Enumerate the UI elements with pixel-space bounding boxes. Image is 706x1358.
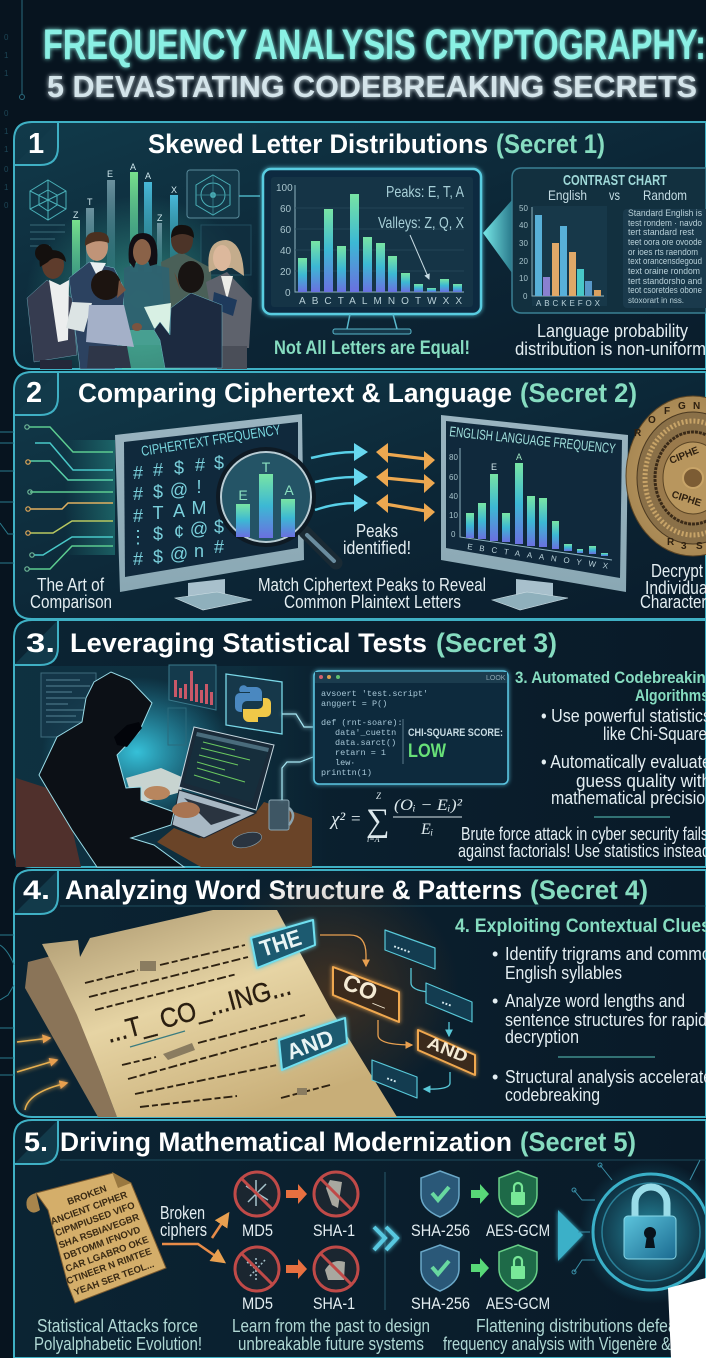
laptop <box>172 727 274 838</box>
caption: match ciphertext peaks <box>258 575 486 612</box>
title: 5 DEVASTATING CODEBREAKING SECRETS <box>47 69 697 104</box>
text: 1 <box>4 145 9 154</box>
code window with chi-square score: lew· <box>335 758 355 768</box>
panel 5 number: 5. <box>24 1127 48 1157</box>
formula: chi-square: = <box>351 809 361 828</box>
arrows: broken ciphers branches <box>162 1214 228 1262</box>
cipher symbols: $ <box>174 458 184 478</box>
caption: flattening distributions <box>443 1316 681 1354</box>
monitor: english language frequency: 0 <box>451 530 456 539</box>
code window with chi-square score: CHI-SQUARE SCORE: <box>408 727 503 739</box>
labels: SHA-256 AES-GCM: AES-GCM <box>486 1221 550 1240</box>
icon: cipher dial: R <box>667 537 675 548</box>
panel: secret 5 mathematical modernization <box>14 1120 706 1358</box>
monitor: letter frequency bar chart: 100 <box>276 183 293 194</box>
code window with chi-square score: data'_cuettn <box>335 728 396 738</box>
scroll: broken ancient cipher: CIPMPIUSED VIFO <box>54 1200 136 1239</box>
cipher symbols: ¢ <box>174 522 184 542</box>
caption: not all letters are equal: Not All Letters are Equal! <box>274 338 470 359</box>
parchment lines <box>85 945 330 1107</box>
scroll: broken ancient cipher: DBTOMM IFNOVD <box>62 1225 142 1263</box>
caption: the art of comparison: The Art of <box>37 575 105 595</box>
text block: exploiting contextual clues: decryption <box>505 1027 579 1047</box>
icon: magnifier: A <box>284 482 294 498</box>
caption: statistical attacks <box>34 1316 202 1354</box>
code window with chi-square score: LOW <box>408 741 446 762</box>
labels: MD5 SHA-1: MD5 <box>242 1221 273 1240</box>
formula: chi-square: (Oᵢ − Eᵢ)² <box>394 797 463 814</box>
tag: AND orange <box>418 1030 475 1075</box>
label: broken ciphers <box>160 1203 207 1240</box>
panel 2 number: 2 <box>26 377 42 409</box>
cipher symbols: n <box>194 541 204 561</box>
icon: magnifier: E <box>238 487 248 503</box>
tag: CO_ <box>333 967 399 1022</box>
labels: SHA-256 AES-GCM: SHA-256 <box>411 1221 470 1240</box>
cipher symbols <box>129 453 224 569</box>
mug <box>269 800 293 830</box>
icon: cipher dial: F <box>664 406 670 417</box>
text: 1 <box>4 183 9 192</box>
caption: flattening distributions: Flattening distributions defeat <box>476 1316 681 1336</box>
glowing table <box>122 330 180 369</box>
cipher symbols: $ <box>153 547 163 567</box>
labels: MD5 SHA-1 <box>242 1221 355 1313</box>
labels: MD5 SHA-1: MD5 <box>242 1294 273 1313</box>
icons: prohibited MD5 and SHA-1 <box>235 1172 358 1291</box>
scroll: broken ancient cipher <box>26 1172 166 1303</box>
code window with chi-square score: printtn(1) <box>321 768 372 778</box>
code window with chi-square score: avsoert 'test.script' <box>321 689 428 699</box>
word graph: trigram tags: CO_ <box>339 969 394 1011</box>
illustration: team of analysts around glowing table: Z <box>157 213 163 223</box>
person: woman in front seen from behind <box>86 270 142 368</box>
caption: match ciphertext peaks: Match Ciphertext Peaks to Reveal <box>258 575 486 595</box>
label: peaks identified <box>343 521 411 558</box>
icon: cipher dial: 3 <box>681 541 687 552</box>
panel 1 heading: (Secret 1) <box>496 129 605 159</box>
callout: peaks and valleys <box>378 184 464 279</box>
caption: statistical attacks: Polyalphabetic Evolution! <box>34 1334 202 1354</box>
illustration: team of analysts around glowing table: A <box>130 162 136 172</box>
monitor: english language frequency: EBCTAAANOYWX <box>467 542 609 571</box>
person: woman centre <box>124 233 172 345</box>
monitor: english language frequency: 60 <box>449 473 458 482</box>
text: 1 <box>4 69 9 78</box>
panel: secret 3 statistical tests <box>14 620 706 867</box>
hooded figure <box>39 672 184 867</box>
panel 2 heading: Comparing Ciphertext & Language <box>78 378 512 408</box>
labels: MD5 SHA-1: SHA-1 <box>313 1221 355 1240</box>
card: contrast chart: tert standard rest <box>628 227 694 237</box>
labels: MD5 SHA-1: SHA-1 <box>313 1294 355 1313</box>
code window with chi-square score: LOOK <box>486 675 506 682</box>
card: contrast chart: tert standorsho and <box>628 276 702 286</box>
panel 4 heading: Analyzing Word Structure & Patterns <box>65 875 522 905</box>
word graph: trigram tags: THE <box>257 924 304 962</box>
cipher symbols: $ <box>214 453 224 473</box>
icon: cipher dial: R <box>634 428 642 439</box>
card: contrast chart: or ioes rts raendom <box>628 247 698 257</box>
cipher symbols: @ <box>170 544 188 564</box>
icon: magnifier: T <box>262 459 271 475</box>
monitor: english language frequency: E <box>491 462 497 472</box>
cipher symbols: # <box>133 463 143 483</box>
monitor: letter frequency bar chart: 0 <box>285 288 291 299</box>
cipher symbols: # <box>133 484 143 504</box>
monitor: letter frequency bar chart: 60 <box>280 204 292 215</box>
card: contrast chart: 10 <box>519 274 528 283</box>
code window with chi-square score <box>314 671 508 784</box>
text block: exploiting contextual clues: codebreaking <box>505 1085 600 1105</box>
text: 0 <box>4 165 9 174</box>
panel 1 heading: Skewed Letter Distributions <box>148 129 488 159</box>
caption: decrypt individual characters <box>640 561 706 612</box>
text: 1 <box>4 51 9 60</box>
scroll: broken ancient cipher: CAR LGABRO OKE <box>64 1234 150 1275</box>
caption: match ciphertext peaks: Common Plaintext Letters <box>284 592 461 612</box>
card: contrast chart <box>512 168 706 313</box>
word graph: trigram tags: AND <box>283 1025 337 1065</box>
cipher symbols: # <box>214 537 224 557</box>
cipher symbols: $ <box>214 517 224 537</box>
illustration: team of analysts around glowing table: Z <box>73 210 79 220</box>
card: contrast chart: 0 <box>523 292 528 301</box>
text block: exploiting contextual clues: • <box>492 1067 498 1087</box>
card: contrast chart: Random <box>643 187 687 203</box>
cipher symbols: M <box>192 498 206 518</box>
monitor: english language frequency <box>441 415 628 610</box>
illustration: team of analysts around glowing table: T <box>87 197 93 207</box>
cipher symbols: # <box>133 506 143 526</box>
caption: learn from the past: Learn from the past to design <box>232 1316 430 1336</box>
illustration: hooded hacker at laptop <box>15 665 330 867</box>
monitor: english language frequency: 10 <box>449 511 458 520</box>
monitor: english language frequency: 40 <box>449 492 458 501</box>
icon: cipher dial: O <box>648 415 656 426</box>
text block: exploiting contextual clues: • <box>492 944 498 964</box>
icon: cipher dial <box>626 396 706 556</box>
text block: exploiting contextual clues <box>455 916 706 1105</box>
illustration: team of analysts around glowing table: X <box>171 185 177 195</box>
cipher symbols: @ <box>190 519 208 539</box>
caption: brute force attack <box>458 824 706 861</box>
monitor: english language frequency: 80 <box>449 453 458 462</box>
labels: SHA-256 AES-GCM <box>411 1221 550 1313</box>
title <box>43 21 706 104</box>
word graph: trigram tags: AND <box>425 1033 471 1066</box>
empty word boxes <box>372 930 472 1098</box>
label: peaks identified: Peaks <box>356 521 398 541</box>
icon: magnifier <box>219 450 336 563</box>
text: 0 <box>4 109 9 118</box>
card: contrast chart: stoxorart in nss. <box>628 296 684 305</box>
formula: chi-square: χ² <box>329 809 345 830</box>
card: contrast chart: vs <box>609 187 620 203</box>
monitor: letter frequency bar chart <box>263 169 481 334</box>
card: contrast chart: ABCKEFOX <box>536 299 601 308</box>
cipher symbols: # <box>133 549 143 569</box>
callout: peaks and valleys: Peaks: E, T, A <box>386 184 464 201</box>
text: 1 <box>4 127 9 136</box>
person: man right in sage sweater <box>161 225 212 320</box>
word graph: trigram tags <box>251 920 475 1098</box>
monitor: english language frequency: ENGLISH LANGUAGE FREQUENCY <box>449 423 617 456</box>
panel 3 heading: (Secret 3) <box>436 628 557 658</box>
cipher symbols: ! <box>196 477 202 497</box>
caption: language probability: Language probability <box>537 321 688 341</box>
card: contrast chart: English <box>548 187 587 203</box>
circuit lines <box>0 425 115 571</box>
icon: radar hexagon left <box>30 180 66 220</box>
cipher symbols: $ <box>153 482 163 502</box>
icons: shields and padlocks <box>421 1171 537 1291</box>
icon: chevrons <box>374 1227 397 1250</box>
label: broken ciphers: ciphers <box>160 1220 207 1240</box>
chart axis letters: ABCTALMNOTWXX <box>299 296 462 307</box>
scroll: broken ancient cipher: CTINEER N RIMTEE <box>65 1246 153 1287</box>
connector beam <box>483 200 512 273</box>
card: contrast chart: CONTRAST CHART <box>563 172 667 189</box>
text: 0 <box>4 201 9 210</box>
cipher symbols: T <box>152 503 164 523</box>
code window with chi-square score: anggert = P() <box>321 699 387 709</box>
panel 1 number: 1 <box>28 128 44 160</box>
caption: learn from the past <box>232 1316 430 1354</box>
card: contrast chart: Standard English is <box>628 208 702 218</box>
icon: cipher dial: CIPHE <box>668 445 701 467</box>
monitor: ciphertext frequency: CIPHERTEXT FREQUENCY <box>140 421 282 459</box>
monitor: ciphertext frequency <box>115 414 304 610</box>
scroll: broken ancient cipher: ANCIENT CIPHER <box>49 1190 129 1228</box>
caption: statistical attacks: Statistical Attacks force <box>37 1316 198 1336</box>
icon: cipher dial: CIPHE <box>670 489 703 509</box>
label: peaks identified: identified! <box>343 538 411 558</box>
decoded fragment: ...T_ CO_...ING... <box>103 971 294 1049</box>
icon: python logo tile <box>226 674 282 734</box>
icon: cipher dial: S <box>696 541 703 552</box>
formula: chi-square: Z <box>376 791 382 801</box>
illustration: team of analysts around glowing table: A <box>145 171 151 181</box>
panel 4 number: 4. <box>23 875 50 905</box>
person: man in front seen from behind <box>154 261 222 368</box>
panel 5 heading: Driving Mathematical Modernization <box>60 1127 512 1157</box>
cipher symbols: @ <box>170 480 188 500</box>
tag: THE <box>251 920 315 968</box>
monitor: letter frequency bar chart: 40 <box>280 246 292 257</box>
cipher symbols: $ <box>153 524 163 544</box>
tablet <box>144 303 171 335</box>
monitor: letter frequency bar chart: 20 <box>280 267 292 278</box>
icon: cipher dial: G <box>678 401 686 412</box>
formula: chi-square: Eᵢ <box>420 821 433 838</box>
label: broken ciphers: Broken <box>160 1203 205 1223</box>
caption: the art of comparison <box>30 575 112 612</box>
cipher symbols: A <box>173 501 185 521</box>
person: man standing back left <box>69 232 125 369</box>
text block: exploiting contextual clues: • <box>492 991 498 1011</box>
panel: secret 2 comparing ciphertext and language <box>0 372 706 619</box>
person: blonde woman <box>206 240 252 369</box>
arrows: cyan flow <box>311 452 356 510</box>
card: contrast chart: 20 <box>519 257 528 266</box>
word graph: trigram tags: ... <box>385 1068 400 1086</box>
illustration: team of analysts around glowing table: E <box>107 169 113 179</box>
card: contrast chart: text oraine rondom <box>628 266 700 276</box>
formula: chi-square: ∑ <box>366 803 390 839</box>
monitor: letter frequency bar chart: 60 <box>280 225 292 236</box>
cipher symbols: # <box>153 460 163 480</box>
caption: the art of comparison: Comparison <box>30 592 112 612</box>
desk surface <box>126 768 184 805</box>
mouse <box>231 829 263 851</box>
card: contrast chart: 40 <box>519 221 528 230</box>
hands <box>144 786 170 800</box>
chair <box>16 778 81 867</box>
panel 3 number: 3. <box>26 628 55 658</box>
cipher symbols: ⋮ <box>129 527 147 547</box>
monitor: english language frequency: A <box>516 452 522 462</box>
icon: cipher dial: N <box>693 401 700 412</box>
scroll: broken ancient cipher: BROKEN <box>66 1183 108 1208</box>
tag: AND cyan <box>279 1018 347 1070</box>
illustration: team of analysts around glowing table <box>25 162 260 405</box>
panel 4 heading: (Secret 4) <box>530 875 648 905</box>
scroll: broken ancient cipher: YEAH SER TEOL... <box>73 1259 156 1298</box>
scroll: broken ancient cipher: SHA RSBIAVEGBR <box>57 1212 141 1251</box>
parchment with partially decoded text <box>25 910 397 1117</box>
word graph: trigram tags: ... <box>440 992 455 1010</box>
text block: exploiting contextual clues: English syllables <box>505 963 622 983</box>
code window with chi-square score: retarn = 1 <box>335 748 386 758</box>
labels: SHA-256 AES-GCM: AES-GCM <box>486 1294 550 1313</box>
panel 3 heading: Leveraging Statistical Tests <box>70 628 427 658</box>
text block: exploiting contextual clues: Analyze word lengths and <box>505 991 685 1011</box>
labels: SHA-256 AES-GCM: SHA-256 <box>411 1294 470 1313</box>
text: 0 <box>4 33 9 42</box>
panel: secret 4 word structure and patterns <box>0 870 706 1117</box>
caption: language probability <box>515 321 706 359</box>
chart bars <box>298 194 462 292</box>
icon: glowing padlock with circuits <box>572 1160 706 1304</box>
card: contrast chart: 30 <box>519 239 528 248</box>
arrows: orange double <box>385 454 426 511</box>
formula: chi-square: i=A <box>367 835 380 844</box>
code window with chi-square score: data.sarct() <box>335 738 396 748</box>
word graph: trigram tags: ..... <box>392 936 414 956</box>
panel 5 heading: (Secret 5) <box>520 1127 636 1157</box>
icon: radar tile <box>187 170 239 218</box>
formula: chi-square <box>329 791 463 844</box>
cipher symbols: # <box>195 455 205 475</box>
icon: large forward arrow <box>558 1210 583 1261</box>
text block: automated codebreaking algorithm <box>515 668 706 808</box>
arrows: incoming <box>17 1038 67 1110</box>
card: contrast chart: 50 <box>519 204 528 213</box>
panel 2 heading: (Secret 2) <box>520 378 637 408</box>
caption: learn from the past: unbreakable future systems <box>238 1334 424 1354</box>
code window with chi-square score: def (rnt-soare): <box>321 718 403 728</box>
person: woman left with bun <box>27 244 92 369</box>
callout: peaks and valleys: Valleys: Z, Q, X <box>378 215 464 232</box>
